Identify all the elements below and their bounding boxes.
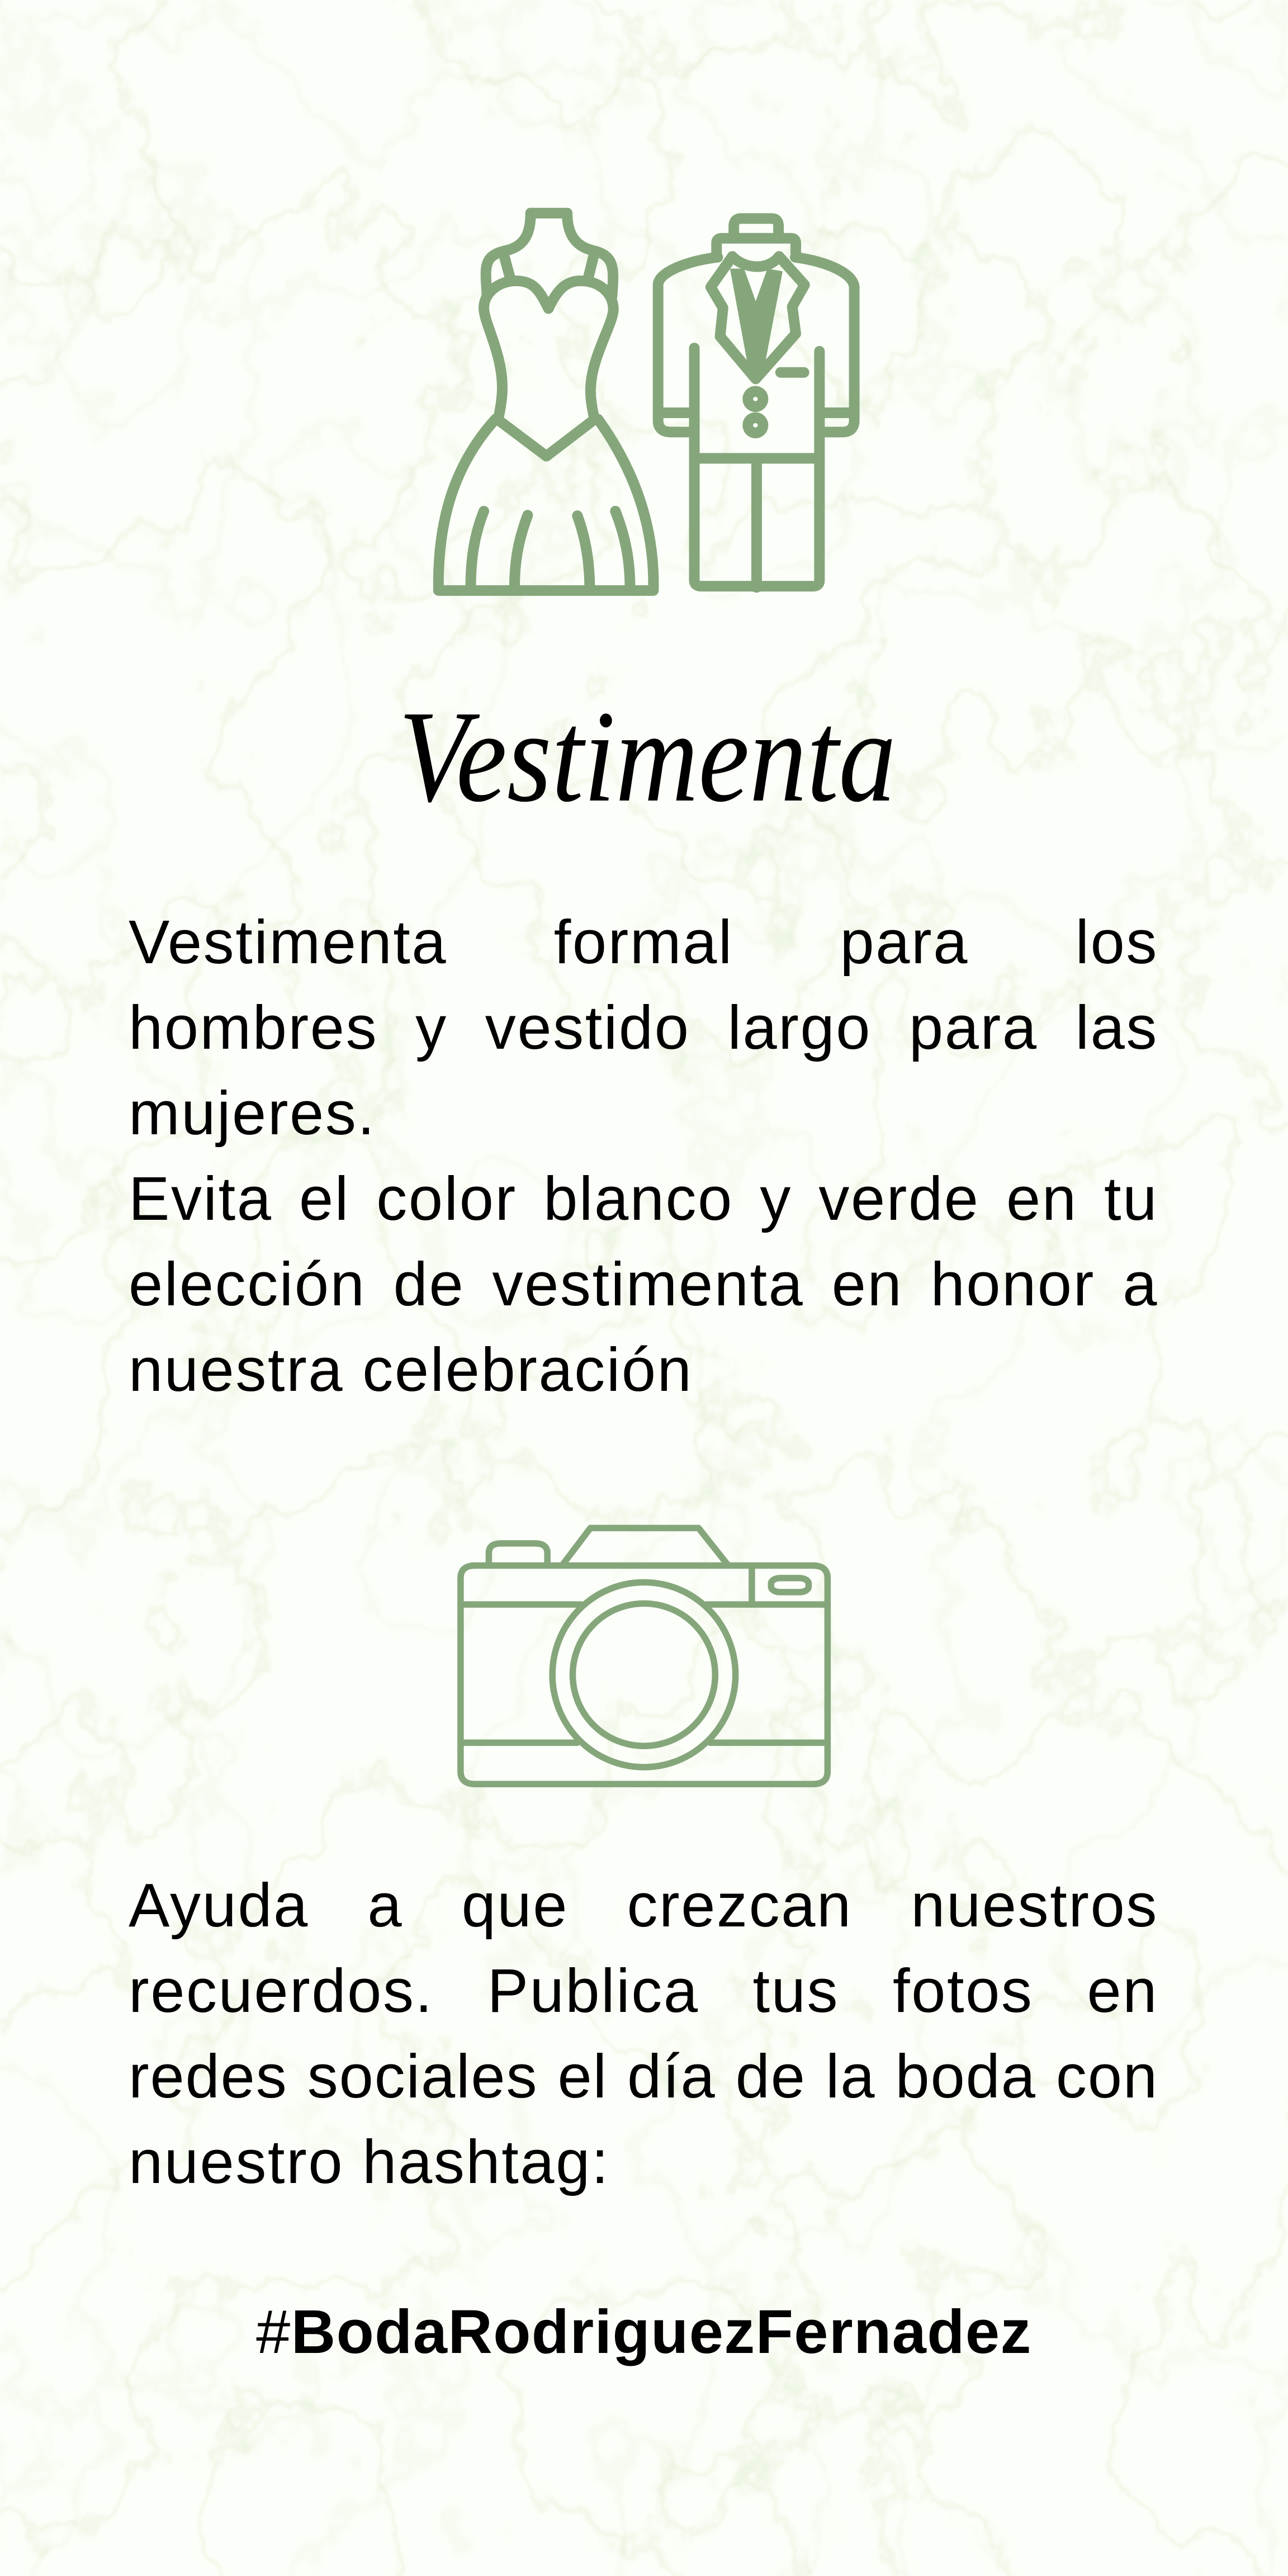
text block: dress code: Evita el color blanco y verde en tu	[129, 1164, 1158, 1233]
icon: jacket button bottom	[742, 412, 768, 438]
text block: photo instructions: Ayuda a que crezcan nuestros	[129, 1871, 1158, 1940]
text block: photo instructions	[129, 1871, 1158, 2196]
text block: dress code	[129, 908, 1158, 1404]
text block: photo instructions: recuerdos. Publica tus fotos en	[129, 1957, 1158, 2025]
text block: dress code: hombres y vestido largo para las	[129, 993, 1158, 1062]
icon: jacket button top	[742, 386, 768, 412]
text block: photo instructions: nuestro hashtag:	[129, 2128, 610, 2196]
hashtag: #BodaRodriguezFernadez	[256, 2298, 1032, 2366]
text block: dress code: mujeres.	[129, 1079, 376, 1148]
icon: suit	[658, 219, 854, 588]
text block: dress code: nuestra celebración	[129, 1336, 693, 1404]
text block: dress code: Vestimenta formal para los	[129, 908, 1158, 977]
icon: tie	[730, 269, 783, 378]
icon: camera	[457, 1525, 831, 1788]
icon: wedding dress and suit	[433, 208, 860, 596]
text block: photo instructions: redes sociales el día de la boda con	[129, 2042, 1158, 2111]
icon: wedding dress	[438, 213, 654, 590]
text block: dress code: elección de vestimenta en honor a	[129, 1250, 1158, 1319]
